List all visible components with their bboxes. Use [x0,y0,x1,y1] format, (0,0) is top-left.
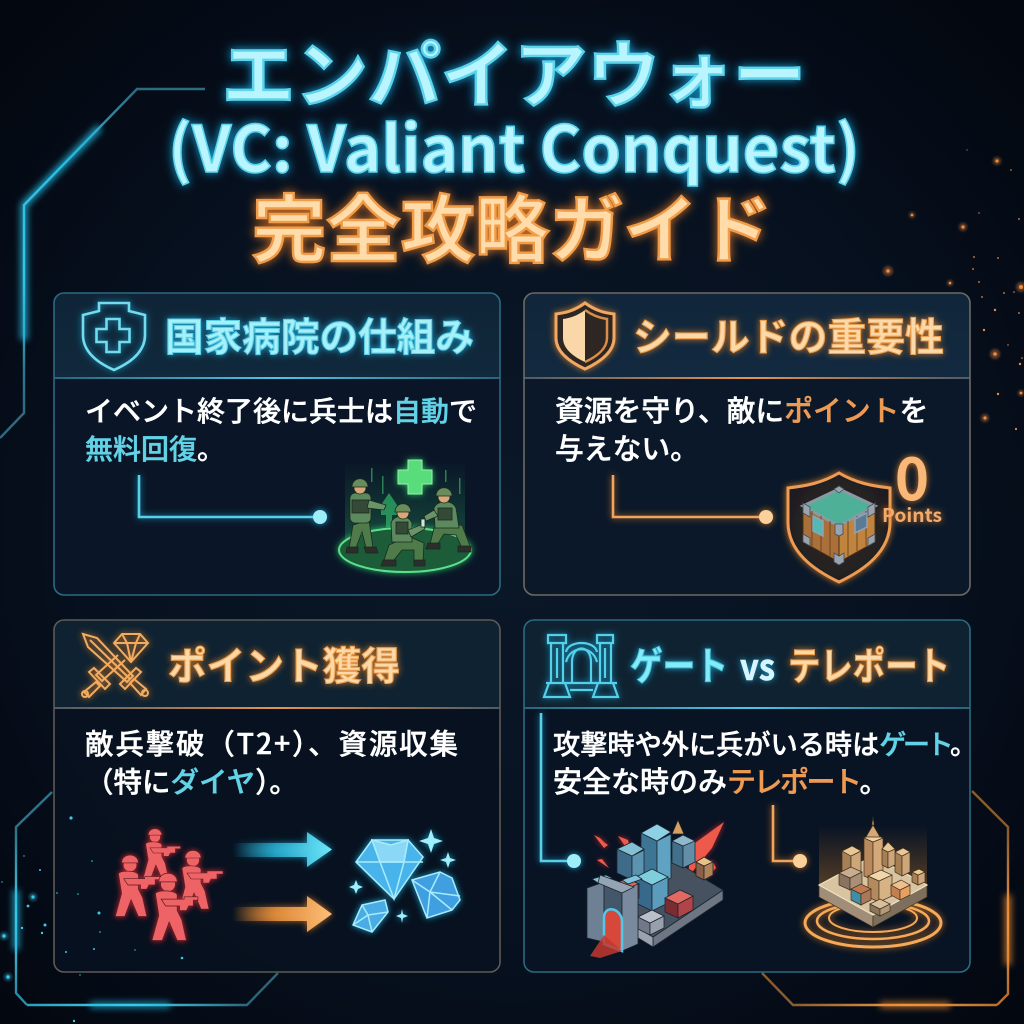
text block: gate description: 攻撃時や外に兵がいる時はゲート。 [553,722,977,762]
panel: earning points [54,620,500,976]
arrow: orange [233,896,332,932]
heading: vs: vs [740,639,775,691]
panel: shield importance [524,293,970,595]
title: line one: エンパイアウォー [222,17,806,123]
soldier: kneeling right [424,488,471,552]
zero points label [882,433,942,528]
attack sparks [594,822,724,884]
text block: earning description line two: （特にダイヤ）。 [85,760,298,801]
title: line two: (VC: Valiant Conquest) [168,99,860,191]
arrow: cyan [233,832,332,867]
text block: hospital description: 無料回復 [85,428,197,468]
heading: earning points: ポイント獲得 [168,636,400,692]
connector line: gate [541,713,581,868]
connector line [139,475,327,524]
soldier: kneeling centre [381,504,425,566]
illustration: chest in shield [788,473,890,582]
text block: hospital description: 。 [197,428,225,468]
particles: orange [883,149,1024,430]
gate arch [587,882,604,942]
text block: shield description: 資源を守り、敵にポイントを [555,389,928,430]
heading: teleport: テレポート [788,636,950,692]
tower [641,833,657,885]
illustration: city under attack [587,820,724,958]
circuit line: upper left [0,89,205,438]
icon: gate [544,635,618,697]
zero points label: 0 [895,433,929,517]
heading: national hospital: 国家病院の仕組み [165,307,474,363]
illustration: enemy soldiers [115,829,223,940]
text block: teleport description: 安全な時のみテレポート。 [553,759,889,801]
connector line: teleport [773,805,807,868]
icon: crossed swords and gem [82,634,148,697]
soldier: standing [346,479,386,553]
particles: blue [0,855,75,1022]
icon: medical shield [83,303,145,370]
panel: national hospital [54,293,500,595]
illustration: teleport city [805,817,941,947]
soldier silhouette left [115,855,162,916]
text block: hospital description: イベント終了後に兵士は自動で [85,390,477,430]
text block: earning description: 敵兵撃破（T2+）、資源収集 [85,722,458,763]
zero points label: Points [882,501,942,528]
illustration: healing soldiers [339,460,471,572]
circuit line: lower right [762,791,1008,1005]
connector line [613,475,773,524]
panel: gate vs teleport [524,620,977,972]
icon: sparkles [349,829,456,923]
heading: shield importance: シールドの重要性 [633,307,944,363]
soldier silhouette top [143,829,180,878]
text block: shield description: 与えない。 [555,427,699,468]
heading: gate: ゲート [630,636,728,692]
particles: blue inside panel [56,816,183,976]
teleport rings [805,899,941,947]
circuit line: lower left [16,792,278,1005]
soldier silhouette front [152,873,198,940]
soldier silhouette right [179,850,223,909]
illustration: diamonds [353,840,460,932]
icon: half shield [556,303,614,369]
title: line three: 完全攻略ガイド [252,171,772,278]
